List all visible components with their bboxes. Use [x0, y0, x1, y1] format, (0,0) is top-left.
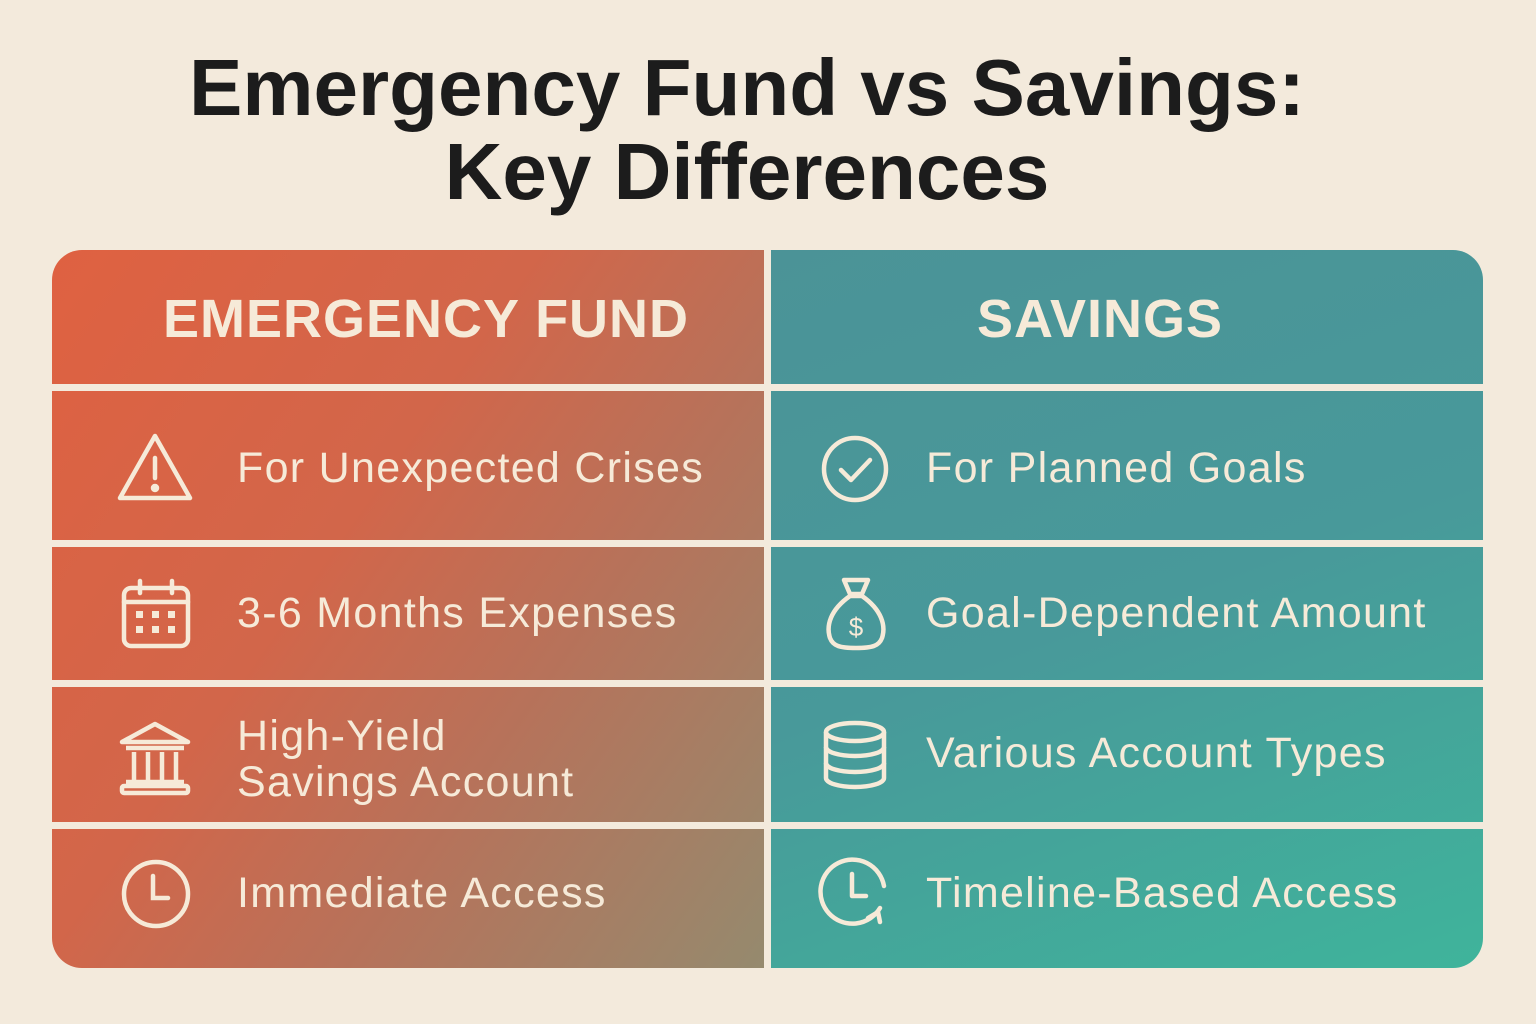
icon: database — [824, 720, 886, 790]
icon: calendar — [122, 578, 190, 648]
panel: emergency fund column — [52, 250, 764, 968]
text: high-yield savings account: Savings Account — [237, 758, 574, 806]
icon: money bag — [826, 578, 886, 650]
heading: savings: SAVINGS — [977, 289, 1223, 349]
title: Key Differences — [445, 127, 1049, 216]
text: 3-6 months: 3-6 Months Expenses — [237, 589, 678, 637]
text: high-yield savings account — [237, 712, 574, 806]
panel: savings column — [771, 250, 1483, 968]
text: goal-dependent amount: Goal-Dependent Amount — [926, 589, 1427, 637]
icon: clock with arrow — [818, 857, 886, 926]
title: Emergency Fund vs Savings: — [189, 43, 1305, 132]
icon: warning — [118, 434, 192, 500]
text: planned goals: For Planned Goals — [926, 444, 1307, 492]
heading: emergency fund: EMERGENCY FUND — [163, 289, 689, 349]
text: immediate access: Immediate Access — [237, 869, 607, 917]
text: various account types: Various Account Types — [926, 729, 1387, 777]
text: timeline-based access: Timeline-Based Access — [926, 869, 1399, 917]
icon: check circle — [822, 436, 888, 502]
title — [189, 43, 1305, 216]
icon: clock — [122, 860, 190, 928]
text: unexpected crises: For Unexpected Crises — [237, 444, 704, 492]
icon: bank — [120, 722, 190, 796]
text: high-yield savings account: High-Yield — [237, 712, 447, 760]
icon: money bag: $ — [849, 612, 864, 642]
